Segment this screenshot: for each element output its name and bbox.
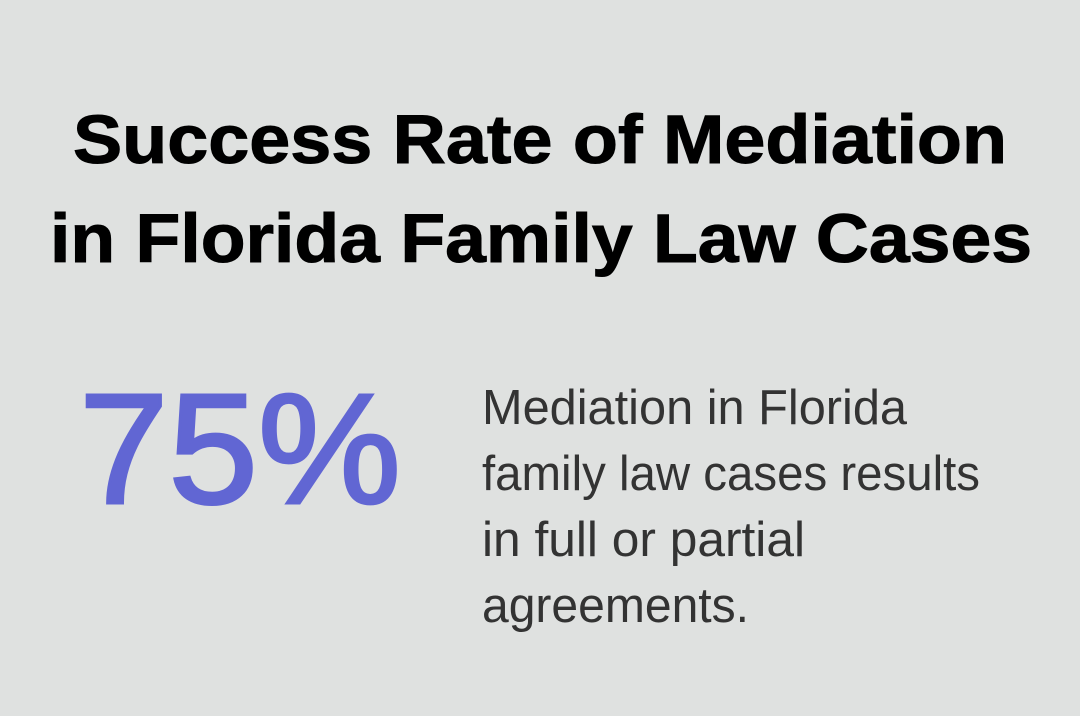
description text	[482, 381, 980, 633]
description text: Mediation in Florida	[482, 381, 908, 435]
title: in Florida Family Law Cases	[50, 200, 1032, 277]
title	[50, 101, 1032, 277]
description text: family law cases results	[482, 447, 980, 501]
description text: agreements.	[482, 579, 749, 633]
description text: in full or partial	[482, 513, 805, 567]
statistic: 75%: 75%	[79, 362, 401, 537]
title: Success Rate of Mediation	[73, 101, 1007, 178]
